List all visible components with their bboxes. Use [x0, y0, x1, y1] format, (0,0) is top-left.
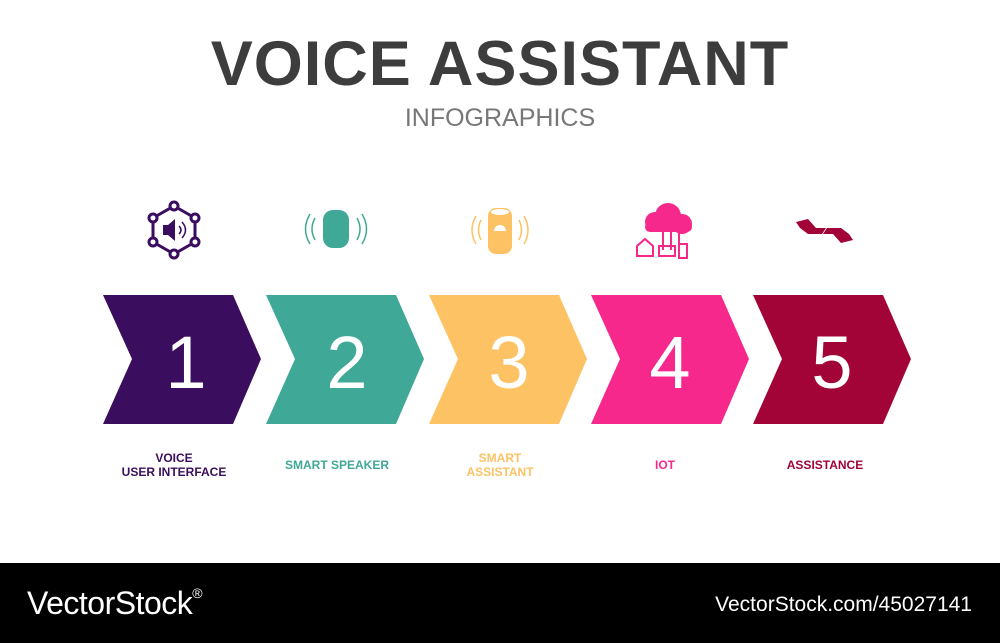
chevron 3: [429, 295, 587, 424]
label 3: [466, 451, 534, 479]
label 3: SMART: [479, 451, 521, 465]
chevron 1: [103, 295, 261, 424]
footer bar: [0, 563, 1000, 643]
chevron 4: 4: [649, 321, 691, 404]
title: VOICE ASSISTANT: [211, 29, 789, 99]
label 5: ASSISTANCE: [787, 458, 863, 472]
chevron 2: [266, 295, 424, 424]
label 1: [122, 451, 226, 479]
label 1: USER INTERFACE: [122, 465, 226, 479]
icon: smart assistant: [472, 208, 528, 254]
chevron 5: 5: [811, 321, 853, 404]
label 2: SMART SPEAKER: [285, 458, 389, 472]
footer url: VectorStock.com/45027141: [715, 593, 972, 616]
chevron 5: [753, 295, 911, 424]
icon: assistance hands: [796, 219, 853, 243]
footer logo: VectorStock®: [27, 585, 202, 621]
chevron 4: [591, 295, 749, 424]
icon: iot: [637, 203, 692, 258]
icon: smart speaker: [306, 210, 366, 248]
label 1: VOICE: [155, 451, 193, 465]
label 4: IOT: [655, 458, 675, 472]
label 3: ASSISTANT: [466, 465, 534, 479]
subtitle: INFOGRAPHICS: [405, 104, 595, 132]
chevron 2: 2: [326, 321, 368, 404]
icon: voice interface: [149, 202, 199, 258]
chevron 1: 1: [165, 321, 207, 404]
chevron 3: 3: [488, 321, 530, 404]
